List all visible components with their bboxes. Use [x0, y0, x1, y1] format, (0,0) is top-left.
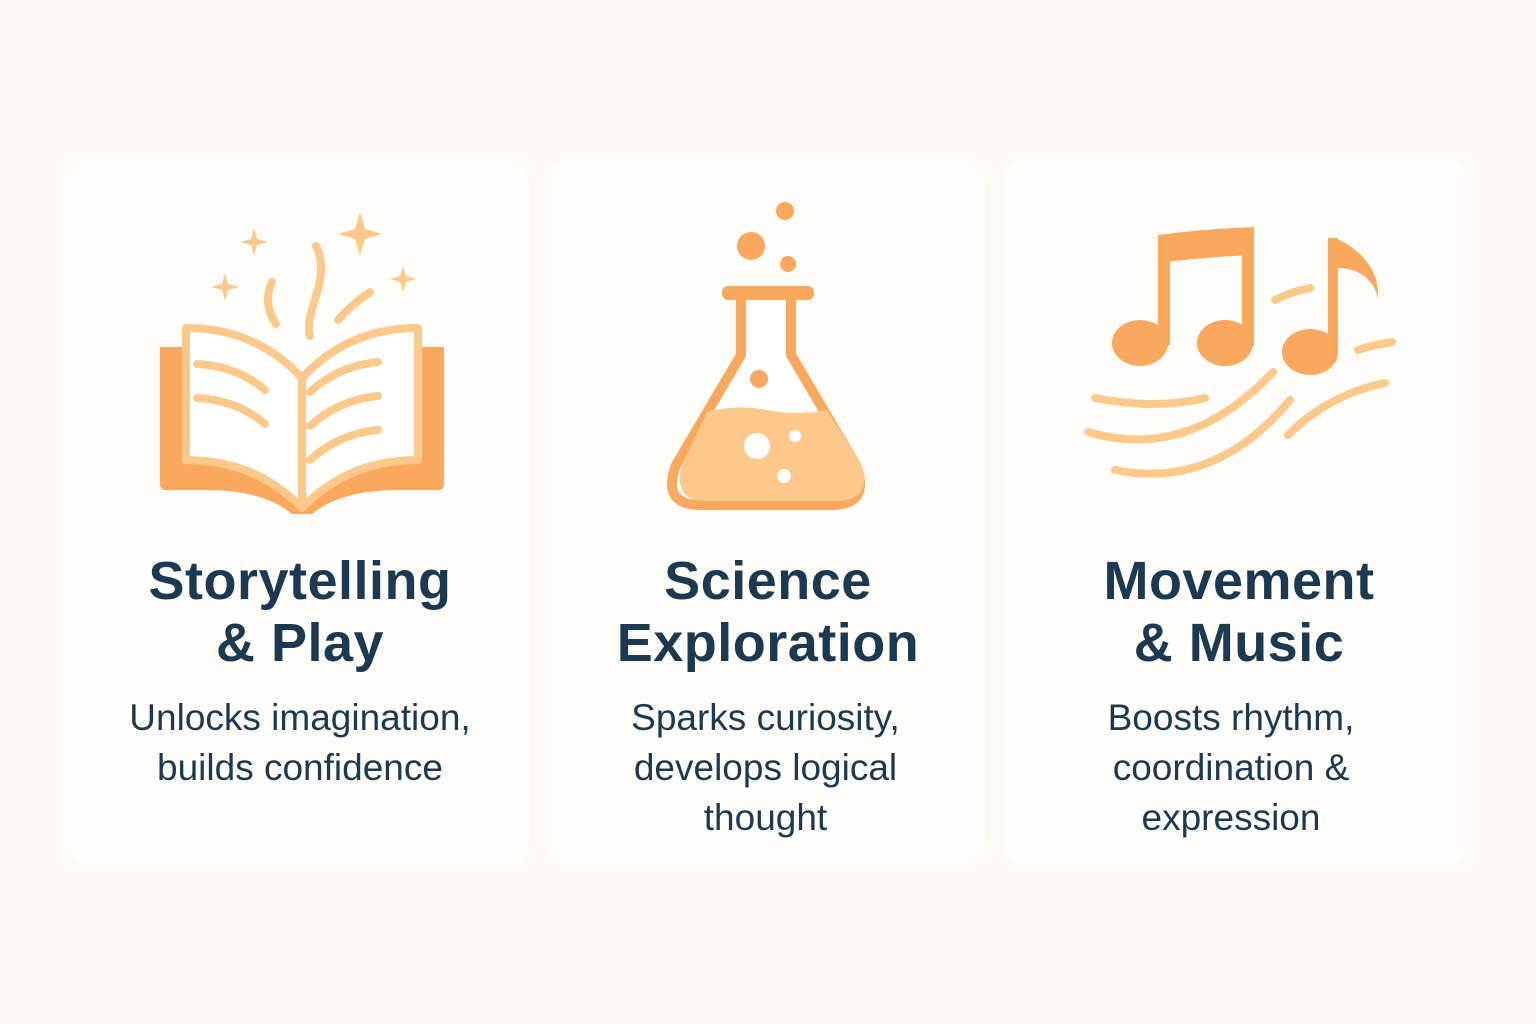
- text: science: Sparks curiosity,: [631, 697, 900, 738]
- icon: open book: [160, 212, 444, 514]
- text: movement: [1108, 697, 1354, 838]
- text: science: thought: [704, 797, 827, 838]
- heading: science: Exploration: [617, 613, 919, 673]
- panel: science: [548, 160, 985, 865]
- text: storytelling: builds confidence: [157, 747, 443, 788]
- text: movement: expression: [1142, 797, 1320, 838]
- text: science: develops logical: [634, 747, 897, 788]
- heading: movement: & Music: [1134, 613, 1344, 673]
- heading: science: Science: [664, 551, 872, 611]
- text: movement: Boosts rhythm,: [1108, 697, 1354, 738]
- heading: storytelling: [148, 551, 452, 673]
- text: science: [631, 697, 900, 838]
- text: storytelling: [129, 697, 471, 788]
- heading: movement: [1103, 551, 1375, 673]
- heading: storytelling: & Play: [216, 613, 384, 673]
- panel: storytelling: [65, 160, 530, 865]
- panel: movement: [1002, 160, 1470, 865]
- text: storytelling: Unlocks imagination,: [129, 697, 471, 738]
- icon: music notes: [1088, 227, 1392, 474]
- text: movement: coordination &: [1113, 747, 1349, 788]
- icon: flask: [672, 202, 864, 505]
- heading: science: [617, 551, 919, 673]
- heading: movement: Movement: [1103, 551, 1375, 611]
- heading: storytelling: Storytelling: [148, 551, 452, 611]
